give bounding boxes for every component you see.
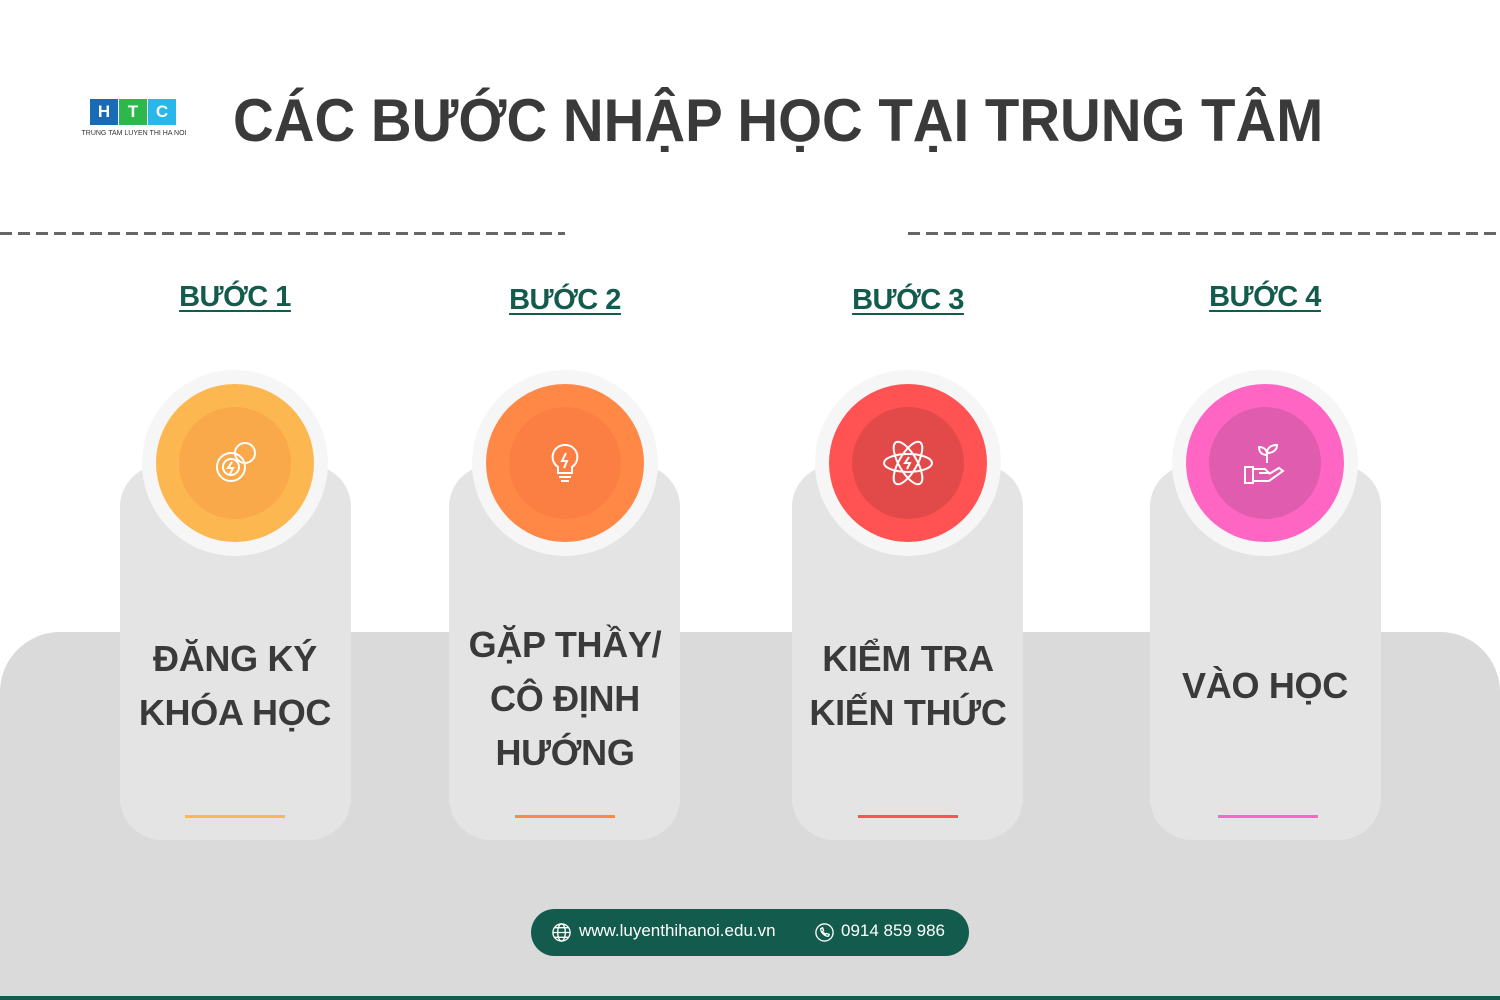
card 3 [792,465,1023,840]
logo: H [98,102,110,121]
bar 2 [515,815,615,818]
icon: globe [552,923,571,942]
logo: C [156,102,168,121]
label 4: VÀO HỌC [1182,665,1348,706]
label 2: CÔ ĐỊNH [490,678,640,719]
bottom green line [0,996,1500,1000]
logo [81,99,186,137]
website text: www.luyenthihanoi.edu.vn [579,921,776,940]
icon circle 3 [815,370,1001,556]
bar 4 [1218,815,1318,818]
icon circle 1 [142,370,328,556]
icon: phone [815,923,834,942]
step 1 [120,280,351,840]
label 3: KIỂM TRA [822,638,994,679]
step 4 [1150,280,1381,840]
label 2: HƯỚNG [495,732,635,773]
gray base panel [0,632,1500,1000]
card 1 [120,465,351,840]
step 2 [449,284,680,840]
icon circle 2 [472,370,658,556]
label 1: KHÓA HỌC [139,692,331,733]
label 1: ĐĂNG KÝ [153,638,317,679]
label 1 [139,638,331,733]
step heading 4: BƯỚC 4 [1209,281,1321,313]
label 3: KIẾN THỨC [809,692,1007,733]
step 3 [792,284,1023,840]
step heading 1: BƯỚC 1 [179,281,291,313]
card 2 [449,465,680,840]
step heading 2: BƯỚC 2 [509,284,621,316]
icon circle 4 [1172,370,1358,556]
label 2: GẶP THẦY/ [469,624,661,665]
card 4 [1150,465,1381,840]
phone text: 0914 859 986 [841,921,945,940]
footer contact pill [531,909,969,956]
bar 1 [185,815,285,818]
logo: T [128,102,138,121]
title: CÁC BƯỚC NHẬP HỌC TẠI TRUNG TÂM [233,87,1323,154]
bar 3 [858,815,958,818]
logo: TRUNG TAM LUYEN THI HA NOI [81,130,186,137]
label 3 [809,638,1007,733]
step heading 3: BƯỚC 3 [852,284,964,316]
label 2 [469,624,662,773]
